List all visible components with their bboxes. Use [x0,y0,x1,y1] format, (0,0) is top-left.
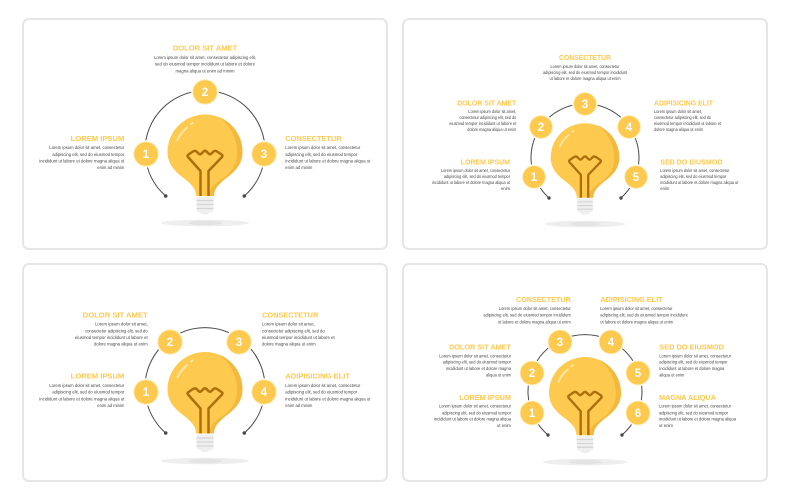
text block: magna aliqua: adipiscing elit, sed do eiusmod tempor [659,410,728,415]
badge 4 [598,329,624,355]
text block: lorem ipsum: LOREM IPSUM [459,393,511,402]
badge 2: 2 [202,87,208,99]
text block: sed do eiusmod: incididunt ut labore et dolore magna [659,366,725,371]
badge 5: 5 [635,368,642,380]
badge 1: 1 [143,387,150,399]
text block: magna aliqua: ut enim [659,423,673,428]
badge 1 [519,400,545,426]
text block: consectetur: Lorem ipsum dolor sit amet, consectetur [550,64,620,69]
text block: dolor sit amet: eiusmod tempor incididunt ut labore et [75,335,148,340]
text block: consectetur: ut labore et dolore magna aliqua ut enim [550,76,621,81]
text block: dolor sit amet: aliqua ut enim [486,372,511,377]
text block: lorem ipsum [432,157,511,191]
text block: dolor sit amet: Lorem ipsum dolor sit amet, consectetur adipiscing elit, [154,55,256,60]
text block: consectetur [483,295,571,324]
text block: dolor sit amet: DOLOR SIT AMET [449,342,511,351]
icon: light bulb [168,114,243,214]
text block: sed do eiusmod: aliqua ut enim [659,372,684,377]
badge 6 [625,400,651,426]
text block: consectetur [262,310,335,347]
text block: adipisicing elit: Lorem ipsum dolor sit amet, consectetur [600,306,673,311]
text block: adipisicing elit [600,295,688,324]
text block: dolor sit amet: incididunt ut labore et dolore magna [446,366,511,371]
text block: adipisicing elit: eiusmod tempor incididunt ut labore et [654,121,722,126]
text block: magna aliqua [659,393,736,428]
text block: consectetur: CONSECTETUR [285,134,342,143]
text block: lorem ipsum: incididunt ut labore et dolore magna aliqua ut [39,396,125,401]
arc with end dots [531,104,639,200]
ground shadow [543,459,627,465]
badge 4: 4 [261,387,268,399]
text block: consectetur: dolore magna aliqua ut enim [262,342,316,347]
panel: four-step bulb [23,264,387,481]
badge 4 [250,378,278,406]
badge 1: 1 [529,408,536,420]
text block: magna aliqua: incididunt ut labore et dolore magna aliqua [659,417,736,422]
badge 2: 2 [167,337,173,349]
arc with end dots [145,91,265,198]
text block: adipisicing elit [285,372,371,408]
text block: adipisicing elit: ADIPISICING ELIT [285,372,350,381]
badge 2 [191,78,219,106]
badge 1 [132,378,160,406]
text block: dolor sit amet [439,342,511,377]
text block: dolor sit amet: dolore magna aliqua ut enim [94,342,148,347]
text block: dolor sit amet: consectetur adipiscing elit, sed do [459,115,517,120]
text block: adipisicing elit: ADIPISICING ELIT [654,99,713,108]
text block: dolor sit amet: Lorem ipsum dolor sit amet, [468,109,516,114]
text block: lorem ipsum: Lorem ipsum dolor sit amet, consectetur [441,168,510,173]
text block: consectetur: adipiscing elit, sed do eiusmod tempor incididunt [483,313,571,318]
text block: consectetur: Lorem ipsum dolor sit amet, consectetur [285,145,361,150]
text block: lorem ipsum: incididunt ut labore et dolore magna aliqua [434,417,511,422]
text block: consectetur: ut labore et dolore magna aliqua ut enim [498,319,571,324]
text block: lorem ipsum [39,372,125,408]
text block: adipisicing elit [654,99,722,132]
text block: adipisicing elit: dolore magna aliqua ut enim [654,127,703,132]
text block: sed do eiusmod: incididunt ut labore et dolore magna aliqua ut [660,180,739,185]
text block: dolor sit amet: consectetur adipiscing elit, sed do [85,328,148,333]
text block: consectetur: Lorem ipsum dolor sit amet, [262,322,315,327]
text block: adipisicing elit: Lorem ipsum dolor sit amet, [654,109,702,114]
text block: lorem ipsum: Lorem ipsum dolor sit amet, consectetur [49,145,125,150]
ground shadow [161,458,249,464]
text block: adipisicing elit: adipiscing elit, sed do eiusmod tempor [285,390,358,395]
text block: lorem ipsum: ut enim [497,423,511,428]
text block: dolor sit amet: DOLOR SIT AMET [457,99,517,108]
text block: dolor sit amet: adipiscing elit, sed do eiusmod tempor [443,360,511,365]
arc with end dots [145,328,265,435]
text block: consectetur: enim ad minim [285,165,312,170]
icon: light bulb [168,352,243,452]
text block: lorem ipsum: enim ad minim [97,165,124,170]
text block: dolor sit amet [449,99,517,132]
badge 3: 3 [582,99,588,111]
text block: adipisicing elit: Lorem ipsum dolor sit amet, consectetur [285,383,361,388]
ground shadow [161,220,249,226]
text block: lorem ipsum: Lorem ipsum dolor sit amet, consectetur [49,383,125,388]
text block: adipisicing elit: incididunt ut labore et dolore magna aliqua ut [285,396,371,401]
badge 4 [616,114,642,140]
badge 3: 3 [261,149,267,161]
text block: sed do eiusmod: SED DO EIUSMOD [660,157,723,166]
badge 3 [250,140,278,168]
badge 1 [521,164,547,190]
text block: lorem ipsum: adipiscing elit, sed do eiusmod tempor [52,390,125,395]
text block: lorem ipsum: LOREM IPSUM [71,134,124,143]
text block: sed do eiusmod: adipiscing elit, sed do eiusmod tempor [659,360,728,365]
badge 3: 3 [557,337,563,349]
text block: consectetur: consectetur adipiscing elit, sed do [262,328,325,333]
badge 5 [623,164,649,190]
text block: sed do eiusmod: adipiscing elit, sed do eiusmod tempor [660,174,727,179]
panel: five-step bulb [403,19,767,249]
text block: sed do eiusmod [659,342,731,377]
text block: consectetur: Lorem ipsum dolor sit amet, consectetur [499,306,571,311]
text block: lorem ipsum: incididunt ut labore et dolore magna aliqua ut [432,180,511,185]
text block: lorem ipsum: enim ad minim [97,403,124,408]
text block: consectetur: eiusmod tempor incididunt ut labore et [262,335,335,340]
text block: consectetur: CONSECTETUR [262,310,319,319]
text block: lorem ipsum: LOREM IPSUM [71,372,124,381]
text block: lorem ipsum [434,393,511,428]
text block: lorem ipsum: adipiscing elit, sed do eiusmod tempor [442,410,511,415]
text block: dolor sit amet: DOLOR SIT AMET [173,44,238,52]
badge 2 [519,360,545,386]
text block: consectetur: CONSECTETUR [516,295,571,304]
text block: sed do eiusmod: Lorem ipsum dolor sit amet, consectetur [659,353,731,358]
badge 3 [225,328,253,356]
ground shadow [545,221,625,227]
text block: magna aliqua: Lorem ipsum dolor sit amet, consectetur [659,404,731,409]
text block: adipisicing elit: enim ad minim [285,403,312,408]
text block: lorem ipsum: incididunt ut labore et dolore magna aliqua ut [39,158,125,164]
panel: six-step bulb [403,264,767,481]
badge 3 [572,91,598,117]
text block: lorem ipsum: adipiscing elit, sed do eiusmod tempor [52,152,125,157]
text block: adipisicing elit: adipiscing elit, sed do eiusmod tempor incididunt [600,313,688,318]
arc with end dots [528,335,642,437]
text block: dolor sit amet [75,310,148,347]
text block: dolor sit amet: dolore magna aliqua ut enim [467,127,516,132]
badge 3: 3 [236,337,242,349]
badge 2: 2 [538,122,544,134]
badge 3 [547,329,573,355]
text block: lorem ipsum: LOREM IPSUM [461,157,510,166]
text block: consectetur [285,134,371,170]
text block: sed do eiusmod: enim [660,186,669,191]
text block: magna aliqua: MAGNA ALIQUA [659,393,717,402]
text block: dolor sit amet: magna aliqua ut enim ad minim [176,68,235,73]
text block: lorem ipsum [39,134,125,170]
text block: lorem ipsum: enim [501,186,510,191]
text block: consectetur [543,53,628,81]
text block: dolor sit amet: Lorem ipsum dolor sit amet, consectetur [439,353,511,358]
panel: three-step bulb [23,19,387,249]
badge 4: 4 [608,337,615,349]
text block: dolor sit amet: DOLOR SIT AMET [83,310,148,319]
text block: sed do eiusmod [660,157,739,191]
text block: consectetur: adipiscing elit, sed do eiusmod tempor [285,152,358,157]
text block: consectetur: adipiscing elit, sed do eiusmod tempor incididunt [543,70,628,75]
text block: adipisicing elit: ut labore et dolore magna aliqua ut enim [600,319,673,324]
text block: sed do eiusmod: SED DO EIUSMOD [659,342,725,351]
text block: lorem ipsum: Lorem ipsum dolor sit amet, consectetur [439,404,511,409]
text block: dolor sit amet: eiusmod tempor incididunt ut labore et [449,121,517,126]
badge 4: 4 [626,122,633,134]
badge 2: 2 [529,368,535,380]
badge 6: 6 [635,408,641,420]
badge 5: 5 [633,172,640,184]
badge 1: 1 [143,149,150,161]
text block: sed do eiusmod: Lorem ipsum dolor sit amet, consectetur [660,168,730,173]
icon: light bulb [551,123,619,215]
text block: consectetur: CONSECTETUR [559,53,612,62]
text block: adipisicing elit: ADIPISICING ELIT [600,295,663,304]
text block: dolor sit amet: sed do eiusmod tempor incididunt ut labore et dolore [155,62,255,67]
badge 1: 1 [531,172,538,184]
badge 1 [132,140,160,168]
text block: dolor sit amet: Lorem ipsum dolor sit amet, [95,322,148,327]
icon: light bulb [549,357,621,453]
badge 2 [156,328,184,356]
text block: adipisicing elit: consectetur adipiscing elit, sed do [654,115,711,120]
text block: lorem ipsum: adipiscing elit, sed do eiusmod tempor [444,174,510,179]
text block: consectetur: incididunt ut labore et dolore magna aliqua ut [285,158,371,164]
text block: dolor sit amet [154,44,256,73]
badge 2 [528,114,554,140]
badge 5 [625,360,651,386]
